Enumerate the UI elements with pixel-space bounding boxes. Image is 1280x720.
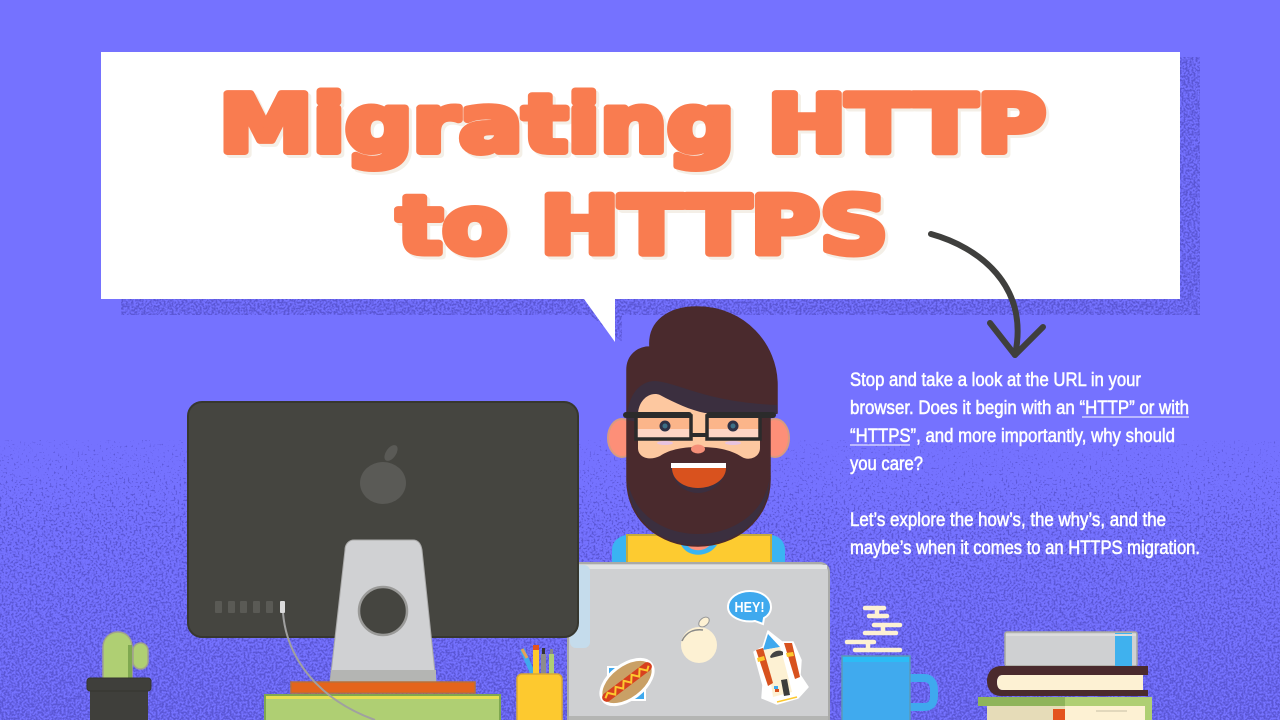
handle — [908, 678, 934, 707]
intro text: browser. Does it begin with an “HTTP” or with — [850, 398, 1189, 419]
mug body — [842, 656, 910, 720]
pot — [87, 678, 151, 720]
coffee mug — [842, 608, 934, 720]
desktop monitor — [188, 402, 578, 720]
ports — [215, 601, 285, 613]
arrow — [931, 234, 1043, 355]
title: Migrating HTTP — [219, 78, 1046, 170]
title — [219, 78, 1049, 275]
intro text: Stop and take a look at the URL in your — [850, 370, 1142, 391]
title: to HTTPS — [400, 183, 891, 275]
monitor logo — [360, 443, 406, 504]
sticker: hey speech bubble — [728, 591, 771, 624]
riser stack — [265, 682, 500, 720]
hair band — [627, 381, 777, 422]
ears — [608, 419, 789, 457]
laptop logo — [681, 615, 717, 663]
stand — [330, 540, 436, 682]
cable — [283, 613, 375, 720]
intro text: you care? — [850, 454, 923, 475]
glasses and eyes — [623, 412, 776, 439]
intro text — [850, 370, 1200, 559]
steam — [847, 608, 900, 650]
character — [608, 307, 789, 563]
grey book — [1005, 632, 1137, 666]
sticker: rocket — [754, 631, 808, 704]
cheeks and nose — [657, 441, 741, 454]
title: to HTTPS — [397, 180, 888, 272]
title: Migrating HTTP — [222, 82, 1049, 174]
green book — [978, 697, 1152, 720]
monitor back — [188, 402, 578, 637]
face — [638, 394, 760, 459]
plant — [103, 632, 148, 680]
hair and beard fill — [627, 307, 777, 534]
pen cup — [517, 645, 562, 720]
laptop — [568, 563, 829, 720]
mouth — [671, 463, 726, 493]
bubble shape — [101, 52, 1180, 342]
title speech bubble — [101, 52, 1180, 342]
cactus — [87, 632, 151, 720]
cup — [517, 674, 562, 720]
intro text: Let’s explore the how’s, the why’s, and the — [850, 510, 1166, 531]
sticker: hot dog — [593, 650, 661, 714]
torso — [612, 535, 785, 563]
sticker: hey speech bubble: HEY! — [734, 599, 764, 616]
pencils — [522, 645, 554, 674]
brown book — [987, 666, 1148, 696]
intro text: maybe’s when it comes to an HTTPS migration. — [850, 538, 1200, 559]
head and beard — [627, 307, 777, 546]
book stack — [978, 632, 1152, 720]
intro text: “HTTPS”, and more importantly, why should — [850, 426, 1175, 447]
